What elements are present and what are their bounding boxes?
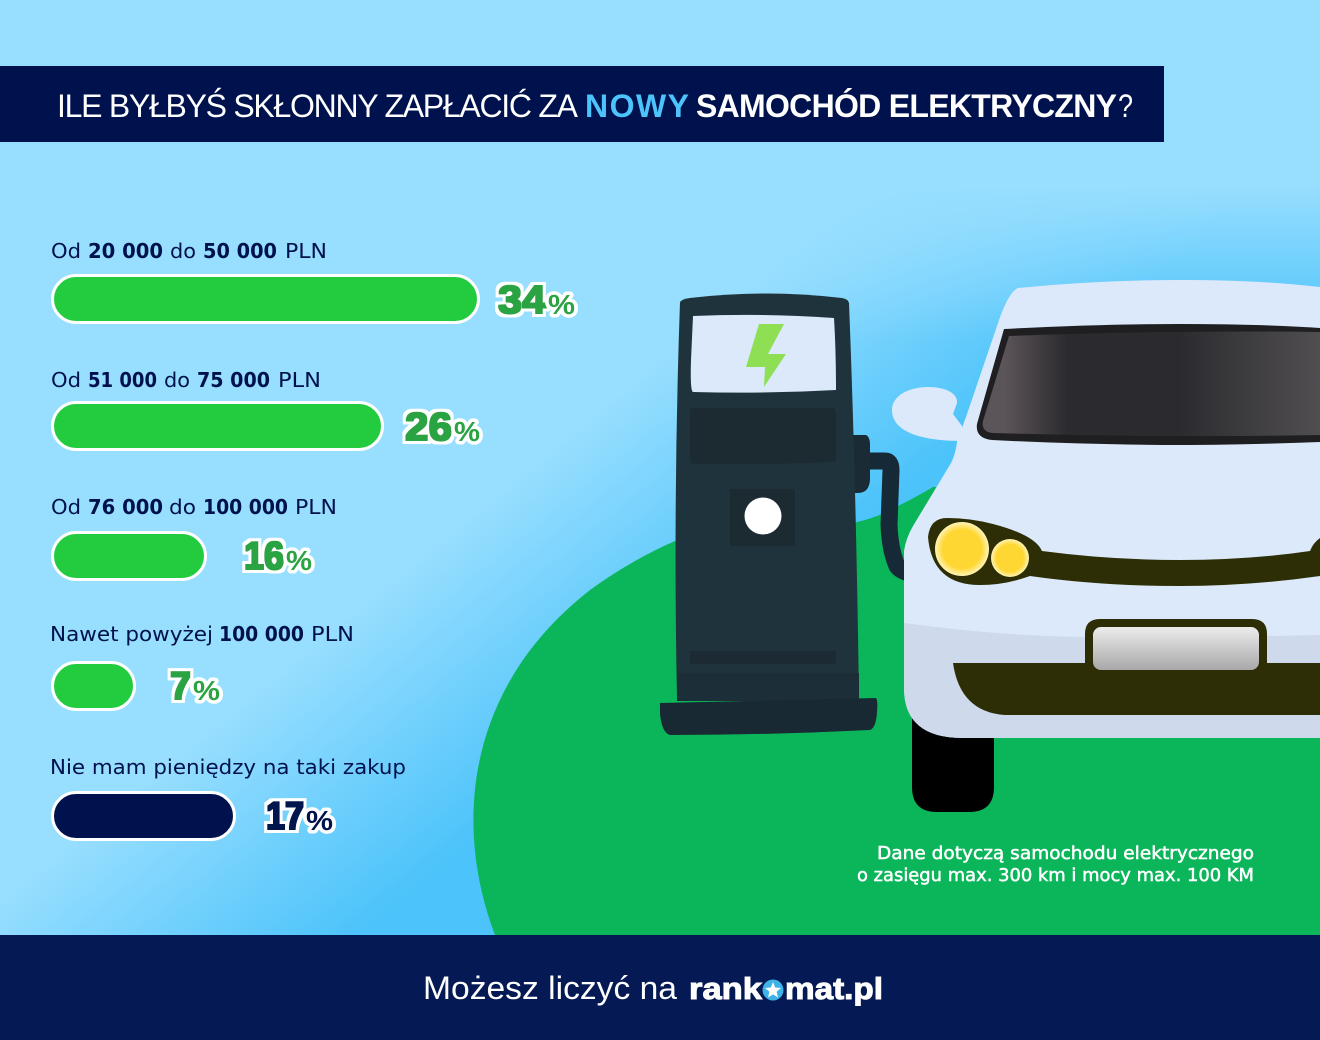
logo rankomat.pl: rank <box>689 971 763 1006</box>
bar row: cannot afford: Nie mam pieniędzy na taki zakup <box>50 755 406 779</box>
logo rankomat.pl: mat.pl <box>785 971 883 1006</box>
dark panel <box>690 408 836 464</box>
bar row: 76 000 to 100 000 PLN: % <box>286 545 312 576</box>
bar row: 20 000 to 50 000 PLN: % <box>548 289 575 320</box>
bar row: over 100 000 PLN <box>50 622 354 710</box>
white button <box>744 498 782 534</box>
bar row: 20 000 to 50 000 PLN: Od <box>51 239 81 263</box>
bar row: 20 000 to 50 000 PLN: 50 000 <box>203 239 277 263</box>
bar row: cannot afford: 17 <box>266 795 304 838</box>
bar row: 51 000 to 75 000 PLN: Od <box>51 368 81 392</box>
bar row: 76 000 to 100 000 PLN: 16 <box>244 535 284 578</box>
bar row: cannot afford: % <box>306 805 333 836</box>
button housing <box>730 489 795 546</box>
bumper <box>904 623 1320 738</box>
bar row: 51 000 to 75 000 PLN: 51 000 <box>88 368 157 392</box>
bar row: 20 000 to 50 000 PLN: PLN <box>285 239 327 263</box>
bar row: 76 000 to 100 000 PLN <box>51 495 337 580</box>
windshield frame <box>977 324 1320 445</box>
bar row: cannot afford <box>50 755 406 840</box>
bar row: over 100 000 PLN: 100 000 <box>219 622 304 646</box>
title bar <box>0 66 1164 142</box>
bar row: 76 000 to 100 000 PLN: 100 000 <box>203 495 288 519</box>
data note: o zasięgu max. 300 km i mocy max. 100 KM <box>857 865 1254 886</box>
bar row: 51 000 to 75 000 PLN: PLN <box>278 368 321 392</box>
windshield glass <box>983 332 1320 436</box>
grille <box>953 663 1320 715</box>
footer: Możesz liczyć na <box>423 970 677 1006</box>
bar row: 51 000 to 75 000 PLN: 75 000 <box>197 368 270 392</box>
icon: lightning bolt <box>746 324 786 387</box>
headlamp small <box>991 539 1029 577</box>
footer <box>0 935 1320 1040</box>
title bar: SAMOCHÓD ELEKTRYCZNY <box>696 88 1117 124</box>
bar row: 51 000 to 75 000 PLN: 26 <box>405 406 452 449</box>
slot <box>690 651 836 664</box>
title bar: ? <box>1118 88 1133 124</box>
bar row: 51 000 to 75 000 PLN: % <box>454 416 480 447</box>
bar row: over 100 000 PLN: % <box>193 675 220 706</box>
title bar: NOWY <box>585 88 689 124</box>
bar row: 51 000 to 75 000 PLN <box>51 368 480 450</box>
bar row: 20 000 to 50 000 PLN: 34 <box>498 279 546 322</box>
bar row: 20 000 to 50 000 PLN <box>51 239 575 322</box>
data note: Dane dotyczą samochodu elektrycznego <box>877 843 1254 864</box>
pump body <box>676 294 859 700</box>
car body <box>904 280 1320 738</box>
bar row: 76 000 to 100 000 PLN: Od <box>51 495 81 519</box>
bar row: over 100 000 PLN: 7 <box>170 665 191 708</box>
license plate <box>1093 627 1259 670</box>
data note <box>857 843 1254 886</box>
bar row: over 100 000 PLN: PLN <box>311 622 354 646</box>
charging cable <box>868 461 912 574</box>
pump base <box>660 698 877 735</box>
connector handle <box>852 435 870 493</box>
wheel <box>912 690 994 812</box>
title bar: ILE BYŁBYŚ SKŁONNY ZAPŁACIĆ ZA <box>57 88 579 124</box>
bar row: over 100 000 PLN: Nawet powyżej <box>50 622 213 646</box>
plate frame <box>1085 619 1267 663</box>
bar row: 51 000 to 75 000 PLN: do <box>164 368 190 392</box>
bar row: 20 000 to 50 000 PLN: 20 000 <box>88 239 163 263</box>
logo rankomat.pl <box>689 971 883 1006</box>
headlight strip <box>928 518 1320 586</box>
car <box>892 280 1320 812</box>
bar row: 20 000 to 50 000 PLN: do <box>170 239 196 263</box>
charging station <box>660 294 912 735</box>
bar row: 76 000 to 100 000 PLN: 76 000 <box>88 495 163 519</box>
green hill <box>473 487 1320 935</box>
bar row: 76 000 to 100 000 PLN: PLN <box>295 495 337 519</box>
pump screen <box>691 315 836 393</box>
headlamp large <box>935 522 989 576</box>
car mirror <box>892 387 962 441</box>
bar row: 76 000 to 100 000 PLN: do <box>169 495 196 519</box>
